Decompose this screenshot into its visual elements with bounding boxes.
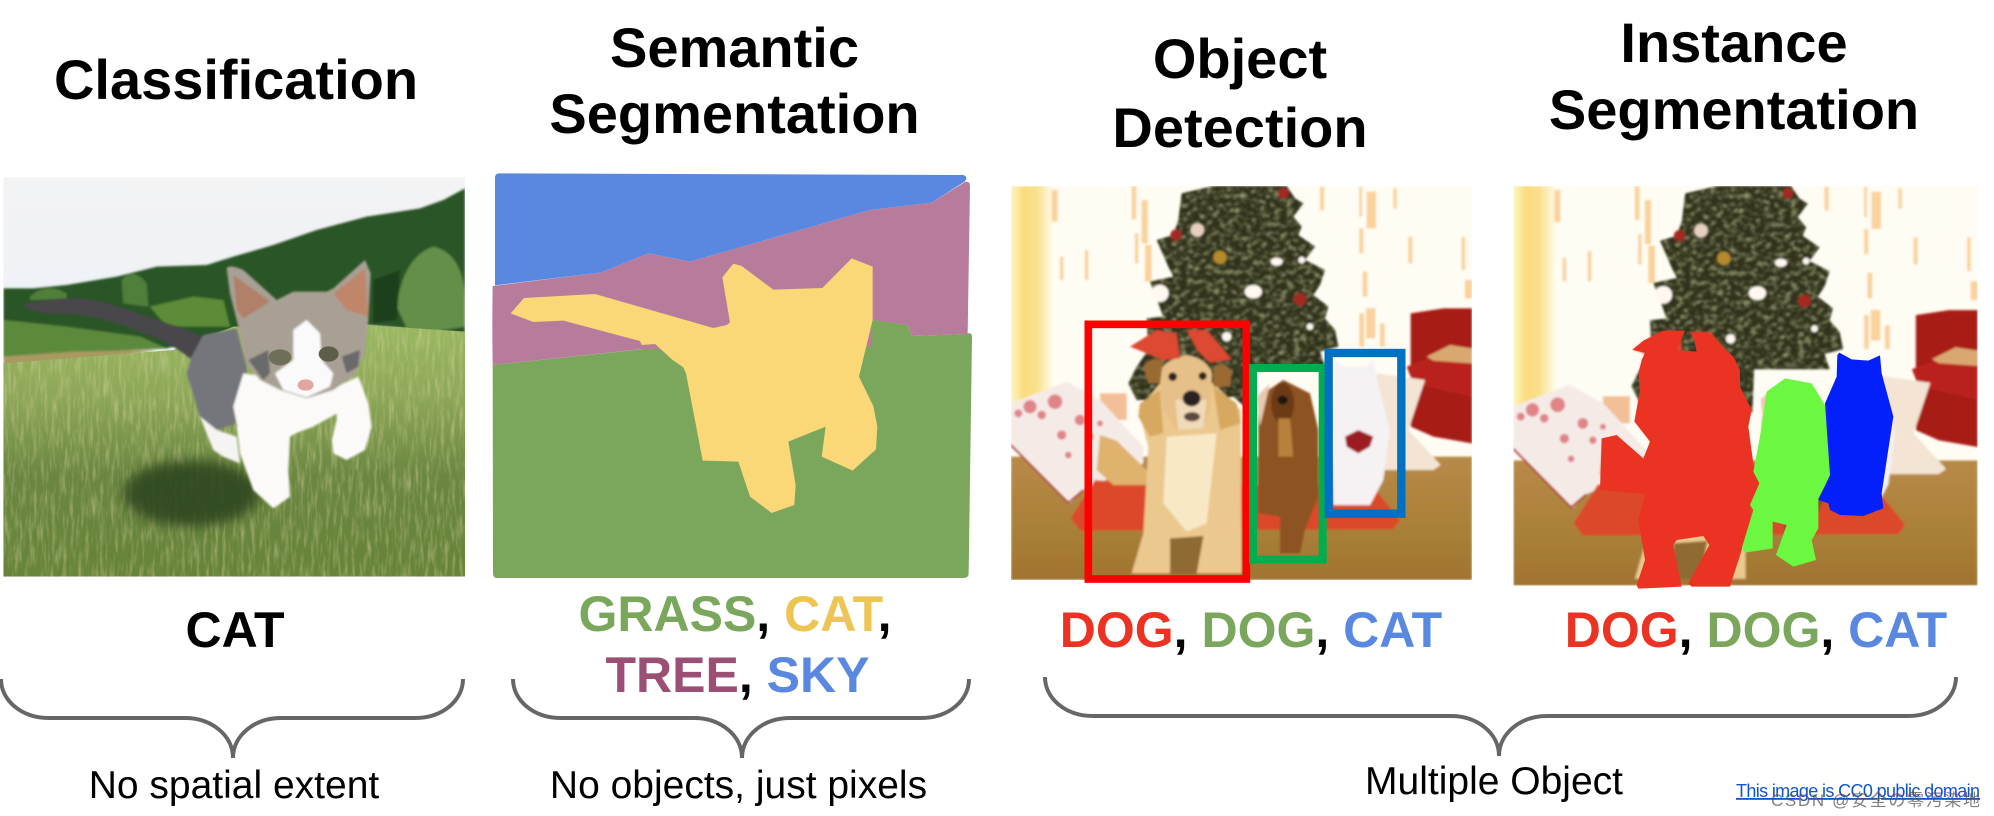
heading: Object Detection: Object: [1153, 27, 1327, 90]
heading: Instance Segmentation: Segmentation: [1549, 78, 1919, 141]
label: GRASS, CAT, TREE, SKY: , SKY: [739, 647, 869, 703]
credit link: This image is CC0 public domain: [1736, 781, 1980, 801]
panel: object detection photo: [1011, 186, 1472, 580]
label: GRASS, CAT, TREE, SKY: TREE: [606, 647, 739, 703]
label: GRASS, CAT, TREE, SKY: GRASS, CAT,: [578, 586, 892, 642]
brace: classification: [1, 679, 463, 758]
box: blue cat: [1329, 353, 1401, 514]
panel: kitten photo: [3, 177, 465, 577]
caption: No objects, just pixels: No objects, just pixels: [550, 764, 927, 807]
label: DOG, DOG, CAT (detection): DOG, DOG, CAT: [1060, 602, 1442, 658]
brace: multiple object: [1045, 677, 1956, 756]
brace: semantic segmentation: [513, 679, 969, 758]
label: CAT: CAT: [185, 602, 285, 658]
box: red dog: [1088, 324, 1246, 579]
label: DOG, DOG, CAT (instance): DOG, DOG, CAT: [1565, 602, 1947, 658]
mask: green dog: [1742, 378, 1832, 567]
heading: Object Detection: Detection: [1112, 96, 1368, 159]
region: grass: [493, 320, 972, 578]
region: tree: [492, 182, 970, 365]
box: green dog: [1253, 368, 1323, 560]
watermark: CSDN @安全の零污染地: [1771, 791, 1980, 810]
region: cat: [511, 258, 877, 513]
caption: No spatial extent: No spatial extent: [89, 764, 379, 807]
panel: semantic segmentation map: [492, 173, 972, 578]
mask: blue cat: [1818, 353, 1893, 516]
heading: Classification: Classification: [54, 48, 418, 111]
region: sky: [495, 173, 966, 285]
caption: Multiple Object: Multiple Object: [1365, 760, 1623, 803]
heading: Semantic Segmentation: Segmentation: [549, 82, 920, 145]
mask: red dog: [1600, 331, 1761, 589]
heading: Instance Segmentation: Instance: [1620, 11, 1848, 74]
panel: instance segmentation photo: [1513, 186, 1978, 589]
heading: Semantic Segmentation: Semantic: [610, 16, 859, 79]
